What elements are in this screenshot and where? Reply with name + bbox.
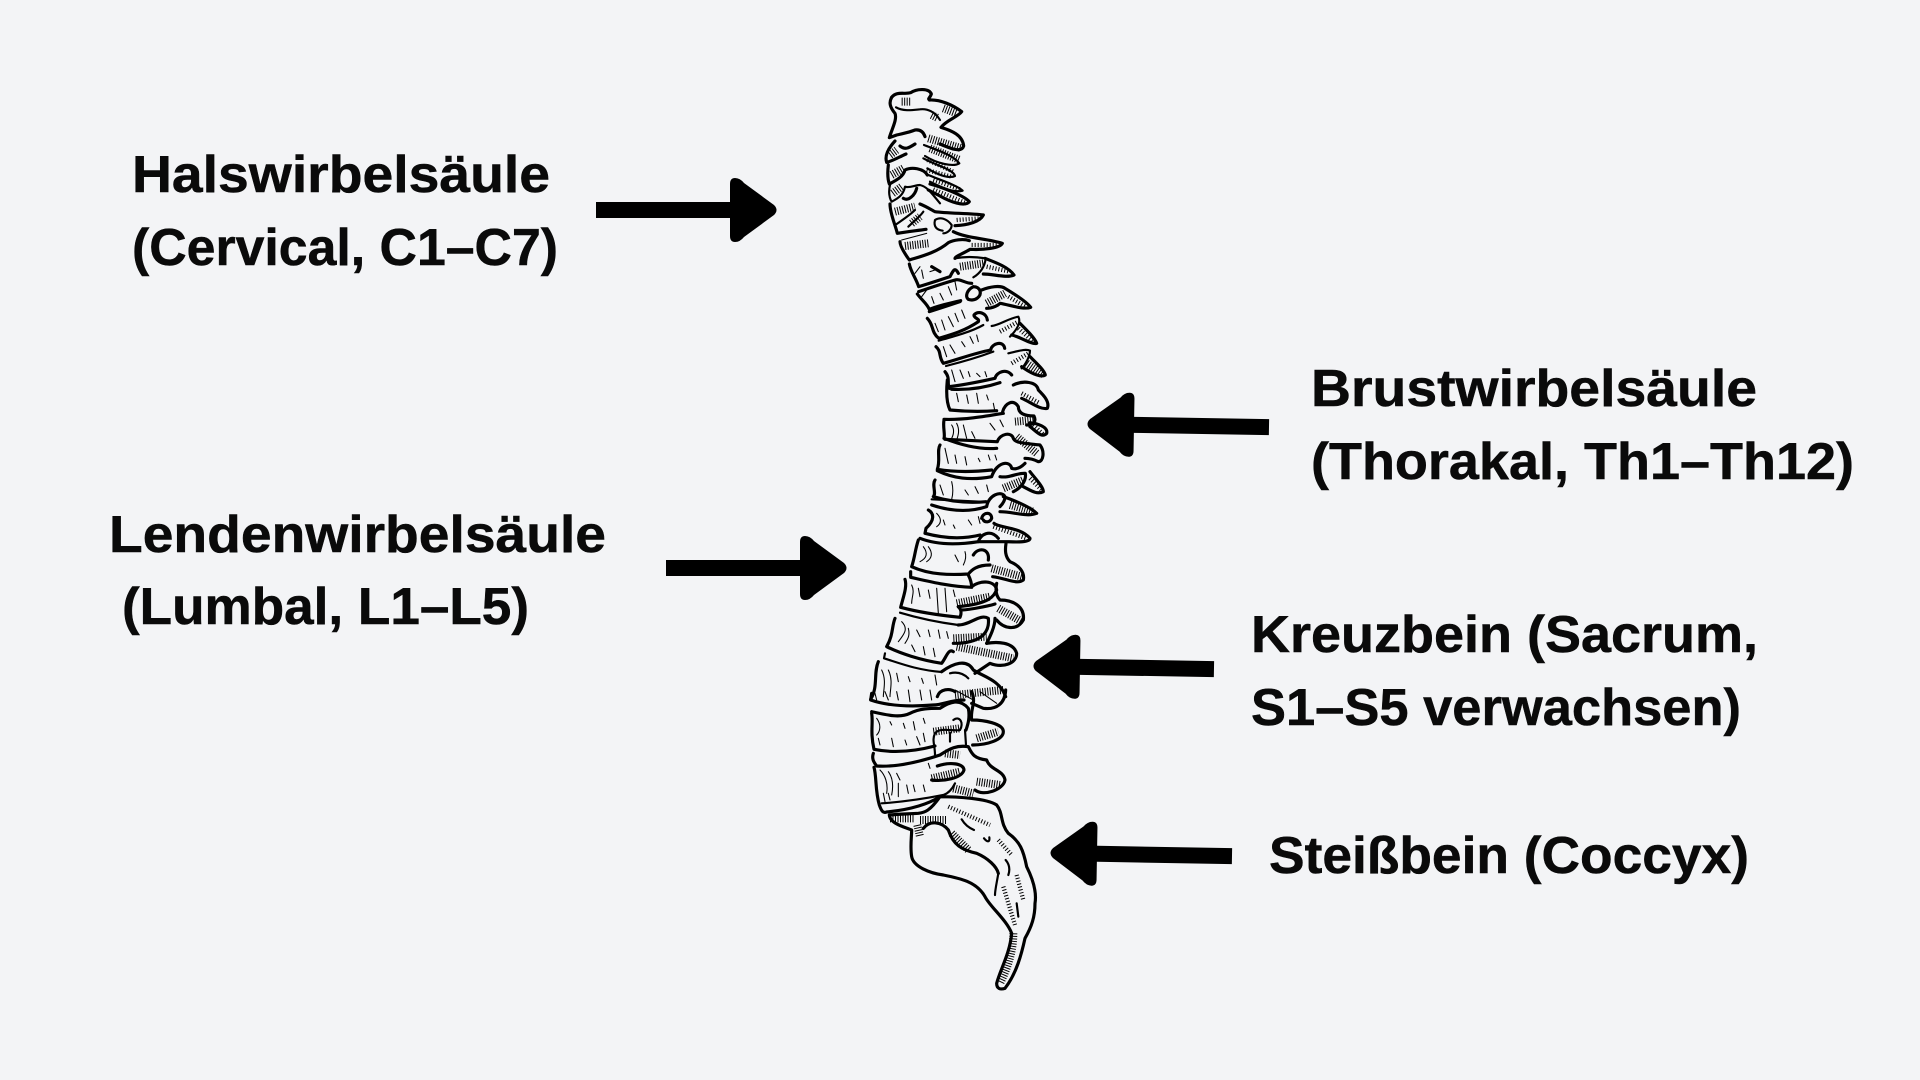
label: Brustwirbelsäule: [1311, 360, 1854, 491]
label: Lendenwirbelsäule: [109, 506, 606, 636]
upper spine: cervical and upper thoracic vertebrae: [886, 90, 1045, 388]
arrow: to cervical spine: [596, 178, 776, 242]
arrow: to coccyx: [1050, 821, 1233, 888]
middle spine: lower thoracic and lumbar vertebrae: [871, 380, 1048, 699]
label: Brustwirbelsäule: Brustwirbelsäule: [1311, 360, 1757, 418]
label: Halswirbelsäule: Halswirbelsäule: [132, 146, 550, 204]
label: Halswirbelsäule: (Cervical, C1–C7): [132, 219, 558, 277]
illustration: human spine side view: [871, 90, 1048, 989]
arrow: to thoracic spine: [1087, 392, 1270, 459]
label: Kreuzbein: Kreuzbein (Sacrum,: [1251, 606, 1758, 664]
label: Lendenwirbelsäule: Lendenwirbelsäule: [109, 506, 606, 564]
label: Brustwirbelsäule: (Thorakal, Th1–Th12): [1311, 433, 1854, 491]
label: Kreuzbein: S1–S5 verwachsen): [1251, 679, 1741, 737]
arrow: to lumbar spine: [666, 536, 846, 600]
label: Kreuzbein: [1251, 606, 1758, 737]
arrow: to sacrum: [1033, 634, 1215, 701]
label: Halswirbelsäule: [132, 146, 558, 277]
lower spine: sacrum and coccyx: [871, 690, 1035, 989]
label: Lendenwirbelsäule: (Lumbal, L1–L5): [122, 578, 529, 636]
label: Steißbein: Steißbein (Coccyx): [1269, 827, 1749, 885]
